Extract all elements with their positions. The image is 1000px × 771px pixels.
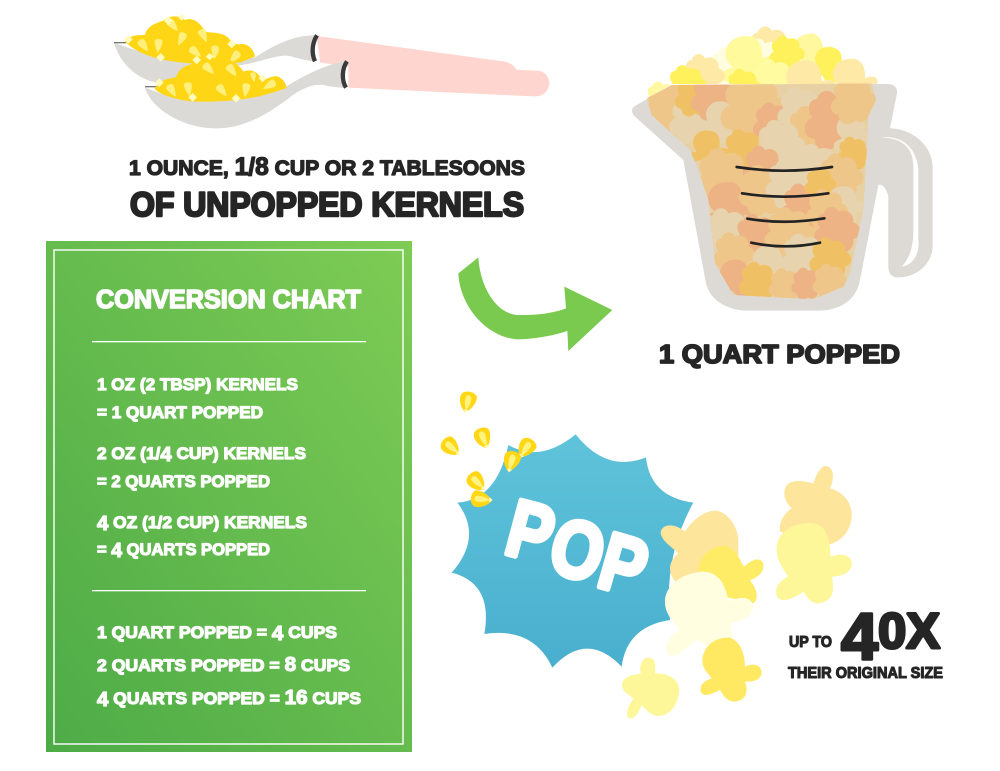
- popcorn cluster: [622, 466, 852, 719]
- back spoon: [114, 14, 517, 83]
- label: 1 quart popped: 1 QUART POPPED: [659, 339, 900, 369]
- quart to cup rows: 4: [272, 623, 284, 645]
- quart to cup rows: 2 QUARTS POPPED = 8 CUPS: [97, 654, 350, 676]
- divider top: [92, 341, 366, 342]
- popcorn piece tan left: [661, 511, 738, 583]
- conversion rows: [97, 375, 307, 562]
- up to: UP TO: [789, 634, 832, 651]
- chart title: CONVERSION CHART: [96, 284, 361, 314]
- popcorn above rim: [648, 26, 878, 96]
- quart to cup rows: QUARTS POPPED =: [108, 689, 285, 708]
- conversion rows: 1 OZ (2 TBSP) KERNELS: [97, 375, 298, 394]
- conversion rows: OZ (1/2 CUP) KERNELS: [108, 513, 307, 532]
- callout: up to 40x: [788, 599, 943, 682]
- conversion rows: 4: [160, 444, 173, 466]
- conversion rows: 2 OZ (1/: [97, 444, 159, 463]
- popcorn piece cream: [665, 572, 753, 657]
- popcorn piece yellow lower: [701, 638, 762, 702]
- quart to cup rows: CUPS: [283, 623, 337, 642]
- popcorn piece yellow: [698, 546, 763, 603]
- handle highlight: [882, 137, 919, 267]
- quart to cup rows: 4: [97, 689, 109, 711]
- conversion rows: QUARTS POPPED: [122, 540, 270, 559]
- divider bottom: [92, 590, 366, 591]
- word POP: [497, 482, 658, 614]
- panel: conversion chart: [46, 241, 412, 752]
- conversion rows: =: [97, 540, 107, 559]
- 40x: 4: [841, 599, 878, 673]
- popcorn piece light yellow: [776, 523, 852, 603]
- popcorn inside jug: [643, 74, 880, 305]
- word POP: P: [590, 515, 658, 614]
- arrow: [458, 257, 612, 351]
- illustration: measuring jug with popcorn: [632, 26, 933, 311]
- word POP: P: [497, 482, 564, 581]
- conversion rows: 4: [111, 540, 123, 562]
- burst: pop: [438, 390, 693, 668]
- conversion rows: = 1 QUART POPPED: [97, 403, 263, 422]
- flying kernels: [438, 390, 539, 508]
- jug body: [632, 84, 933, 311]
- conversion rows: 4: [97, 513, 109, 535]
- front spoon: [145, 53, 549, 128]
- conversion rows: CUP) KERNELS: [172, 444, 306, 463]
- quart to cup rows: 16 CUPS: [285, 687, 360, 709]
- measuring lines: [737, 167, 832, 246]
- heading: of unpopped kernels: OF UNPOPPED KERNELS: [130, 186, 524, 224]
- panel inner border: [54, 250, 403, 744]
- quart to cup rows: [97, 623, 361, 711]
- conversion rows: = 2 QUARTS POPPED: [97, 472, 270, 491]
- word POP: O: [541, 499, 614, 600]
- popcorn piece light lower-left: [622, 658, 679, 719]
- popcorn piece tan top: [780, 466, 852, 545]
- heading: 1 ounce line: 1 OUNCE, 1/8 CUP OR 2 TABLESOONS: [129, 153, 525, 181]
- their original size: THEIR ORIGINAL SIZE: [788, 665, 943, 682]
- 40x: 0X: [878, 603, 940, 659]
- illustration: two spoons of kernels: [114, 14, 549, 128]
- quart to cup rows: 1 QUART POPPED =: [97, 623, 262, 642]
